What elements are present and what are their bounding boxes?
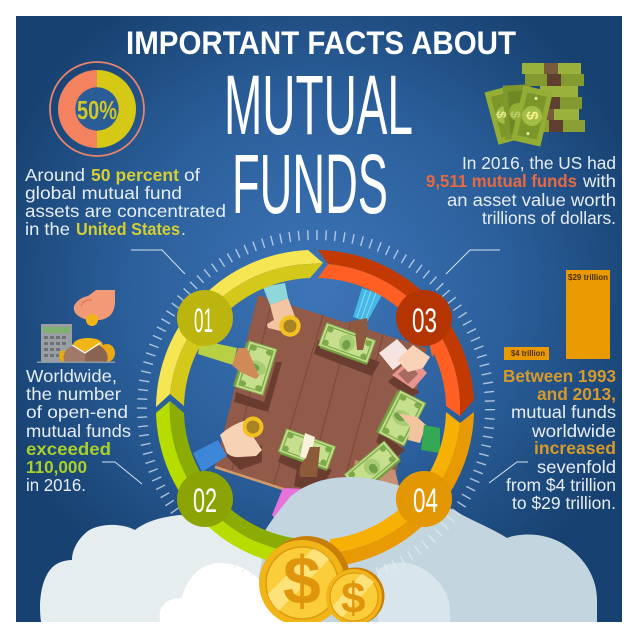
segment 04: orange arc (330, 412, 474, 567)
text block: sevenfold increase fact: Between 1993 (503, 366, 616, 386)
text block: sevenfold increase fact (503, 366, 616, 513)
wooden table with hands and money (193, 283, 440, 520)
text block: 9,511 mutual funds fact: trillions of dollars. (482, 208, 616, 228)
bar chart: 4 to 29 trillion: $29 trillion (568, 273, 608, 282)
text block: 50 percent fact: global mutual fund (25, 183, 182, 203)
badge 01: 01 (194, 302, 213, 340)
text block: sevenfold increase fact: from $4 trillion (506, 475, 616, 495)
text block: 110,000 funds fact (26, 366, 131, 495)
segment 01: yellow arc (156, 250, 323, 407)
hand: bottom with banded money (278, 429, 336, 477)
text block: sevenfold increase fact: and 2013, (537, 384, 616, 404)
title: important facts about: IMPORTANT FACTS ABOUT (126, 25, 516, 61)
badge 03 (396, 290, 452, 346)
text block: 9,511 mutual funds fact: with (582, 171, 616, 191)
text block: 110,000 funds fact: 110,000 (26, 457, 87, 477)
text block: 50 percent fact: in the (25, 219, 70, 239)
icon: money stack: $ (494, 111, 509, 119)
text block: sevenfold increase fact: sevenfold (537, 457, 616, 477)
badge 04 (396, 471, 452, 527)
text block: 50 percent fact: assets are concentrated (25, 201, 226, 221)
hand: right top with pink money (379, 339, 436, 389)
text block: sevenfold increase fact: increased (534, 438, 616, 458)
hand: lower right with money (344, 441, 401, 494)
text block: 9,511 mutual funds fact: 9,511 mutual funds (426, 171, 577, 191)
text block: 110,000 funds fact: the number (26, 384, 121, 404)
segment 03: red arc (318, 250, 474, 416)
bar chart: 4 to 29 trillion: $4 trillion (511, 349, 545, 358)
hand: top left with coin (263, 283, 301, 337)
text block: 110,000 funds fact: Worldwide, (26, 366, 117, 386)
icon: gold coins: $ (341, 574, 365, 623)
badge 01 (177, 290, 233, 346)
hand: right with money and green sleeve (376, 389, 440, 453)
title: mutual: MUTUAL (224, 58, 413, 152)
icon: money stack: $ (508, 111, 523, 119)
badge 04: 04 (413, 482, 438, 520)
icon: gold coins: $ (283, 543, 321, 619)
text block: 50 percent fact: 50 percent (91, 165, 179, 185)
text block: 110,000 funds fact: mutual funds (26, 421, 131, 441)
text block: 50 percent fact (25, 165, 226, 239)
clouds (40, 477, 597, 622)
text block: sevenfold increase fact: to $29 trillion. (512, 493, 616, 513)
text block: sevenfold increase fact: mutual funds (511, 402, 616, 422)
sleeve: pink bottom (272, 488, 306, 520)
badge 02 (177, 471, 233, 527)
hand: top with blue striped sleeve and money (318, 288, 382, 365)
icon: 50 percent donut: 50% (77, 95, 117, 125)
text block: sevenfold increase fact: worldwide (531, 421, 616, 441)
text block: 9,511 mutual funds fact: In 2016, the US had (462, 153, 616, 173)
tick ring (142, 235, 490, 583)
text block: 110,000 funds fact: of open-end (26, 402, 128, 422)
text block: 50 percent fact: Around (25, 165, 85, 185)
text block: 9,511 mutual funds fact: an asset value worth (447, 190, 616, 210)
icon: money stack (484, 63, 585, 147)
icon: hand with coin, calculator and money bag (37, 290, 115, 363)
hand: lower left with coin and blue sleeve (193, 416, 264, 472)
text block: 50 percent fact: of (184, 165, 200, 185)
bar chart: 4 to 29 trillion (504, 270, 610, 360)
hand: left with money and green sleeve (198, 340, 277, 395)
icon: gold coins (259, 536, 384, 626)
badge 02: 02 (193, 482, 217, 520)
title: funds: FUNDS (232, 137, 388, 231)
badge 03: 03 (412, 302, 437, 340)
text block: 9,511 mutual funds fact (426, 153, 616, 228)
icon: 50 percent donut (50, 62, 144, 156)
text block: 110,000 funds fact: in 2016. (26, 475, 86, 495)
segment 02: green arc (156, 401, 300, 567)
text block: 110,000 funds fact: exceeded (26, 439, 111, 459)
callout lines (102, 250, 528, 484)
text block: 50 percent fact: . (181, 219, 186, 239)
icon: money stack: $ (523, 111, 540, 120)
text block: 50 percent fact: United States (76, 219, 180, 239)
